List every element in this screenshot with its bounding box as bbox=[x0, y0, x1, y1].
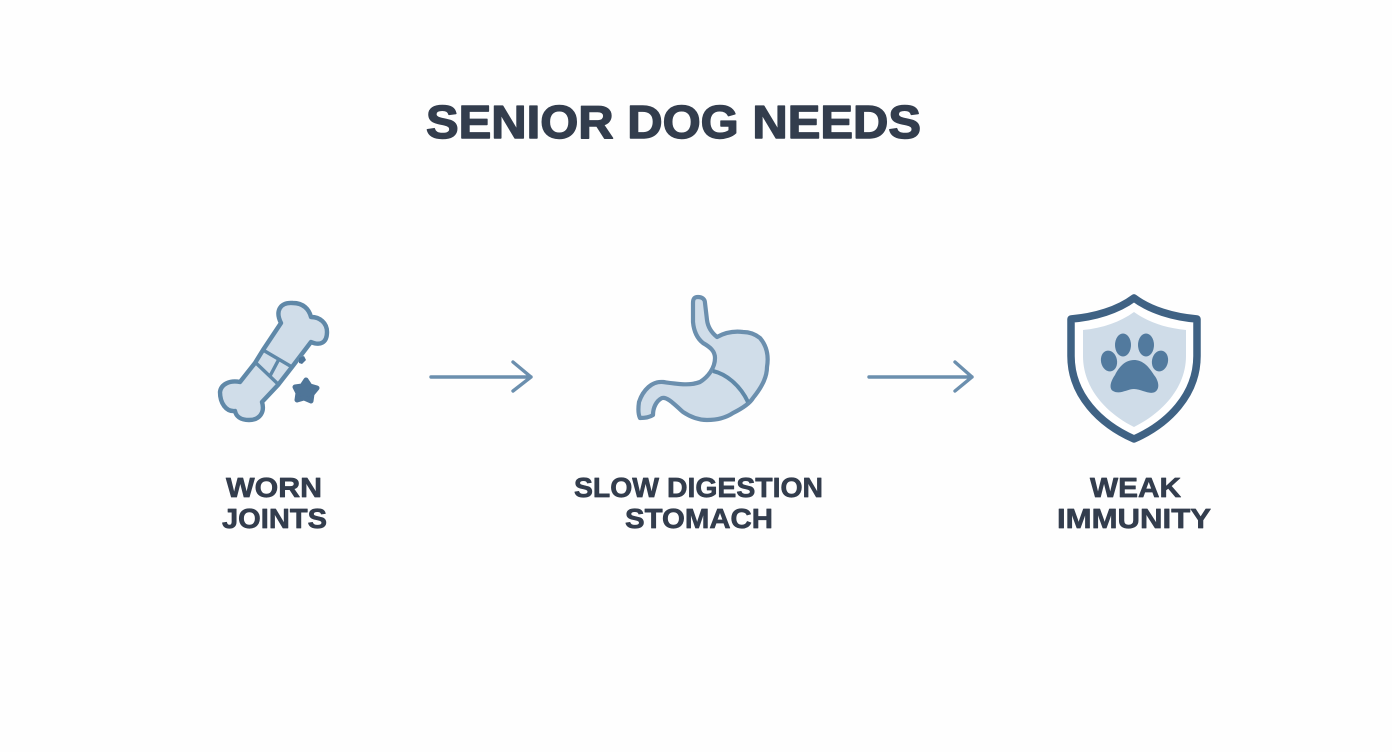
arrow: stomach to immunity bbox=[869, 362, 972, 391]
label: weak immunity bbox=[1057, 472, 1211, 534]
label: slow digestion stomach bbox=[574, 472, 823, 534]
label: worn joints: JOINTS bbox=[222, 503, 327, 534]
icon: paw bbox=[1099, 334, 1170, 393]
arrow: joints to stomach bbox=[431, 362, 531, 391]
icon: worn bone joint bbox=[220, 303, 327, 420]
label: weak immunity: IMMUNITY bbox=[1057, 503, 1211, 534]
icon: stomach bbox=[638, 297, 768, 420]
label: weak immunity: WEAK bbox=[1090, 472, 1181, 503]
icon: bone chip bbox=[299, 356, 306, 364]
label: slow digestion stomach: STOMACH bbox=[625, 503, 773, 534]
label: worn joints: WORN bbox=[226, 472, 322, 503]
label: worn joints bbox=[222, 472, 327, 534]
title: SENIOR DOG NEEDS bbox=[426, 96, 921, 148]
icon: shield with paw bbox=[1071, 298, 1197, 439]
label: slow digestion stomach: SLOW DIGESTION bbox=[574, 472, 823, 503]
icon: star spark bbox=[295, 380, 317, 401]
